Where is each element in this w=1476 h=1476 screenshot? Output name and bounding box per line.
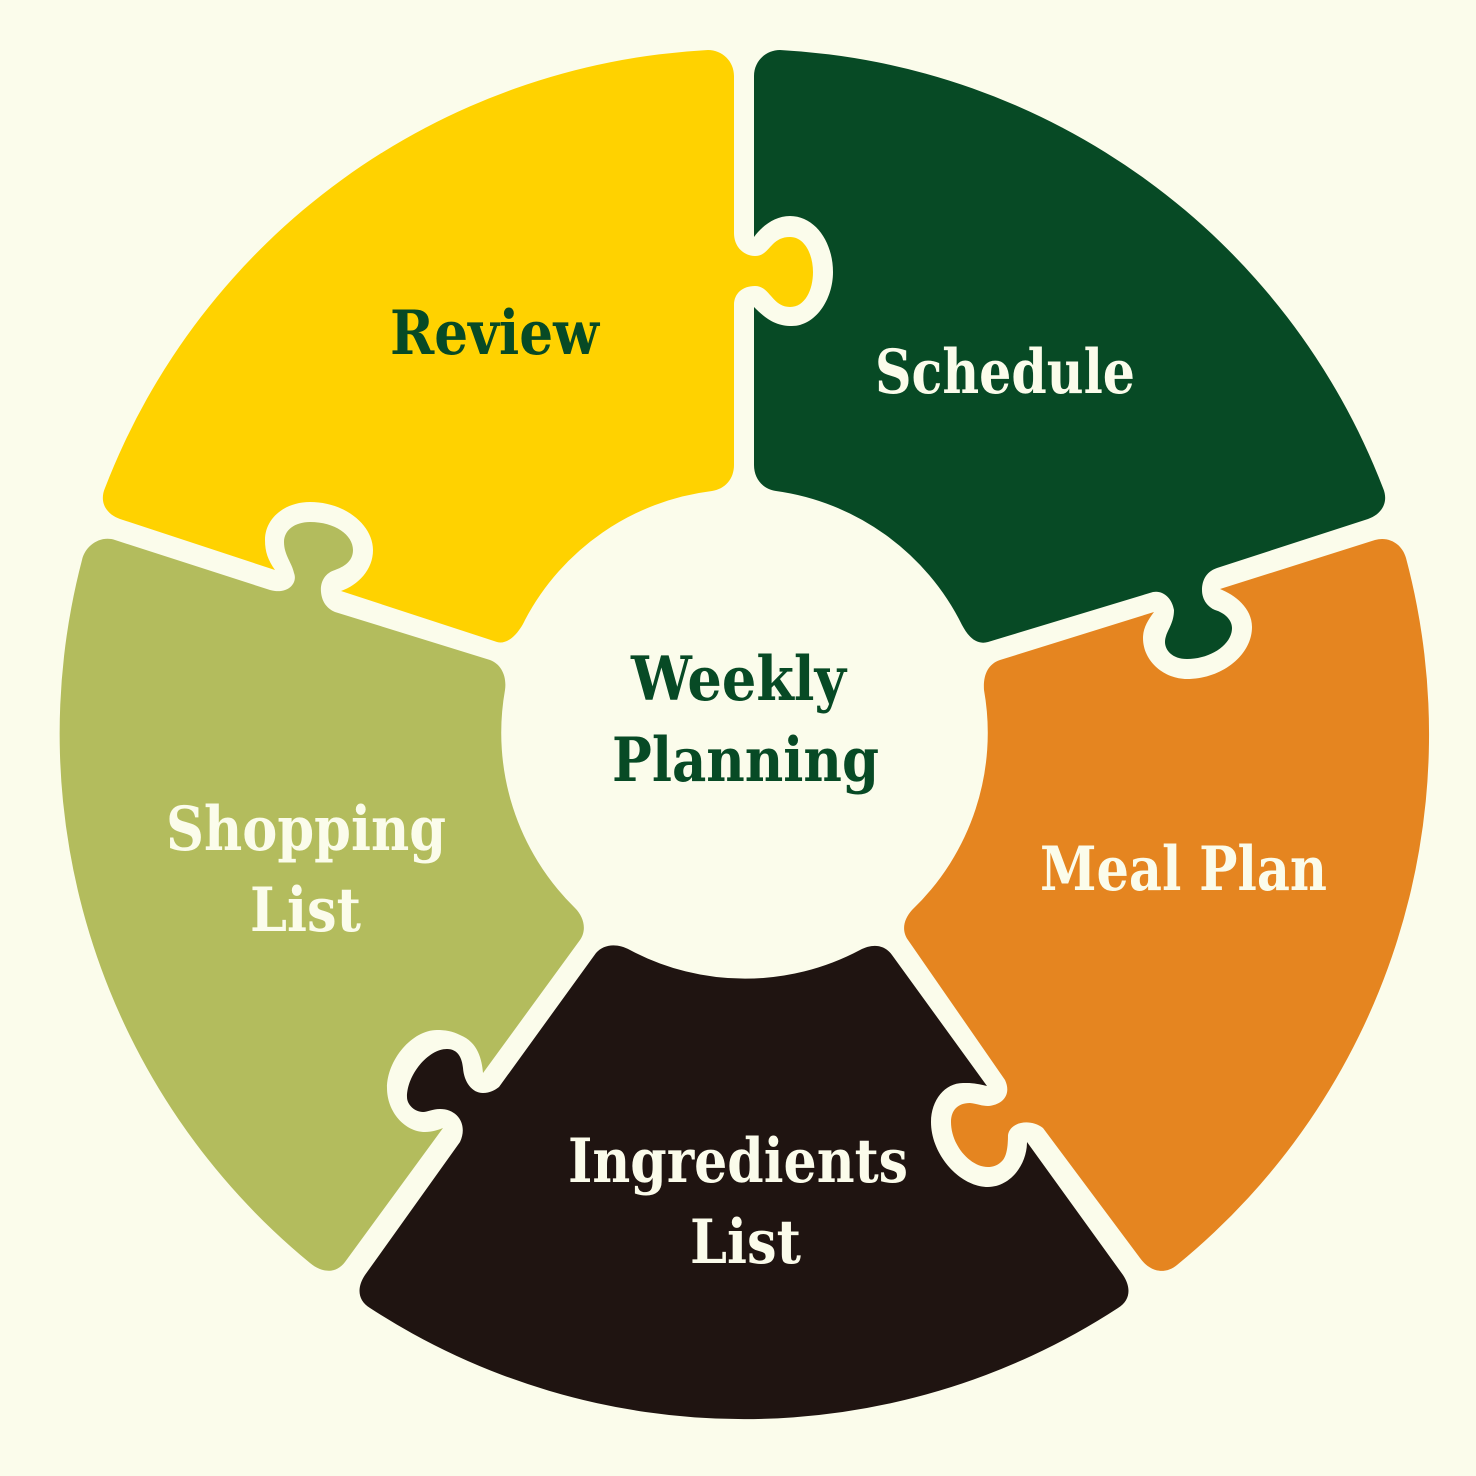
- label: Schedule: Schedule: [875, 337, 1135, 408]
- label: Shopping List: Shopping: [166, 794, 446, 865]
- center title: Weekly Planning: Weekly: [630, 644, 847, 715]
- yellow puzzle piece: [103, 50, 813, 642]
- label: Meal Plan: Meal Plan: [1040, 834, 1327, 905]
- green puzzle piece: [754, 50, 1385, 659]
- panel: Schedule: [754, 50, 1385, 659]
- label: Ingredients List: List: [690, 1207, 801, 1278]
- orange puzzle piece: [904, 539, 1429, 1271]
- panel: Shopping List: [60, 522, 584, 1271]
- center title: Weekly Planning: Planning: [612, 725, 879, 796]
- panel: Ingredients List: [360, 945, 1128, 1419]
- label: Ingredients List: Ingredients: [568, 1126, 908, 1197]
- olive puzzle piece: [60, 522, 584, 1271]
- panel: Meal Plan: [904, 539, 1429, 1271]
- label: Review: Review: [390, 298, 600, 369]
- panel: Review: [103, 50, 813, 642]
- label: Shopping List: List: [250, 875, 361, 946]
- black puzzle piece: [360, 945, 1128, 1419]
